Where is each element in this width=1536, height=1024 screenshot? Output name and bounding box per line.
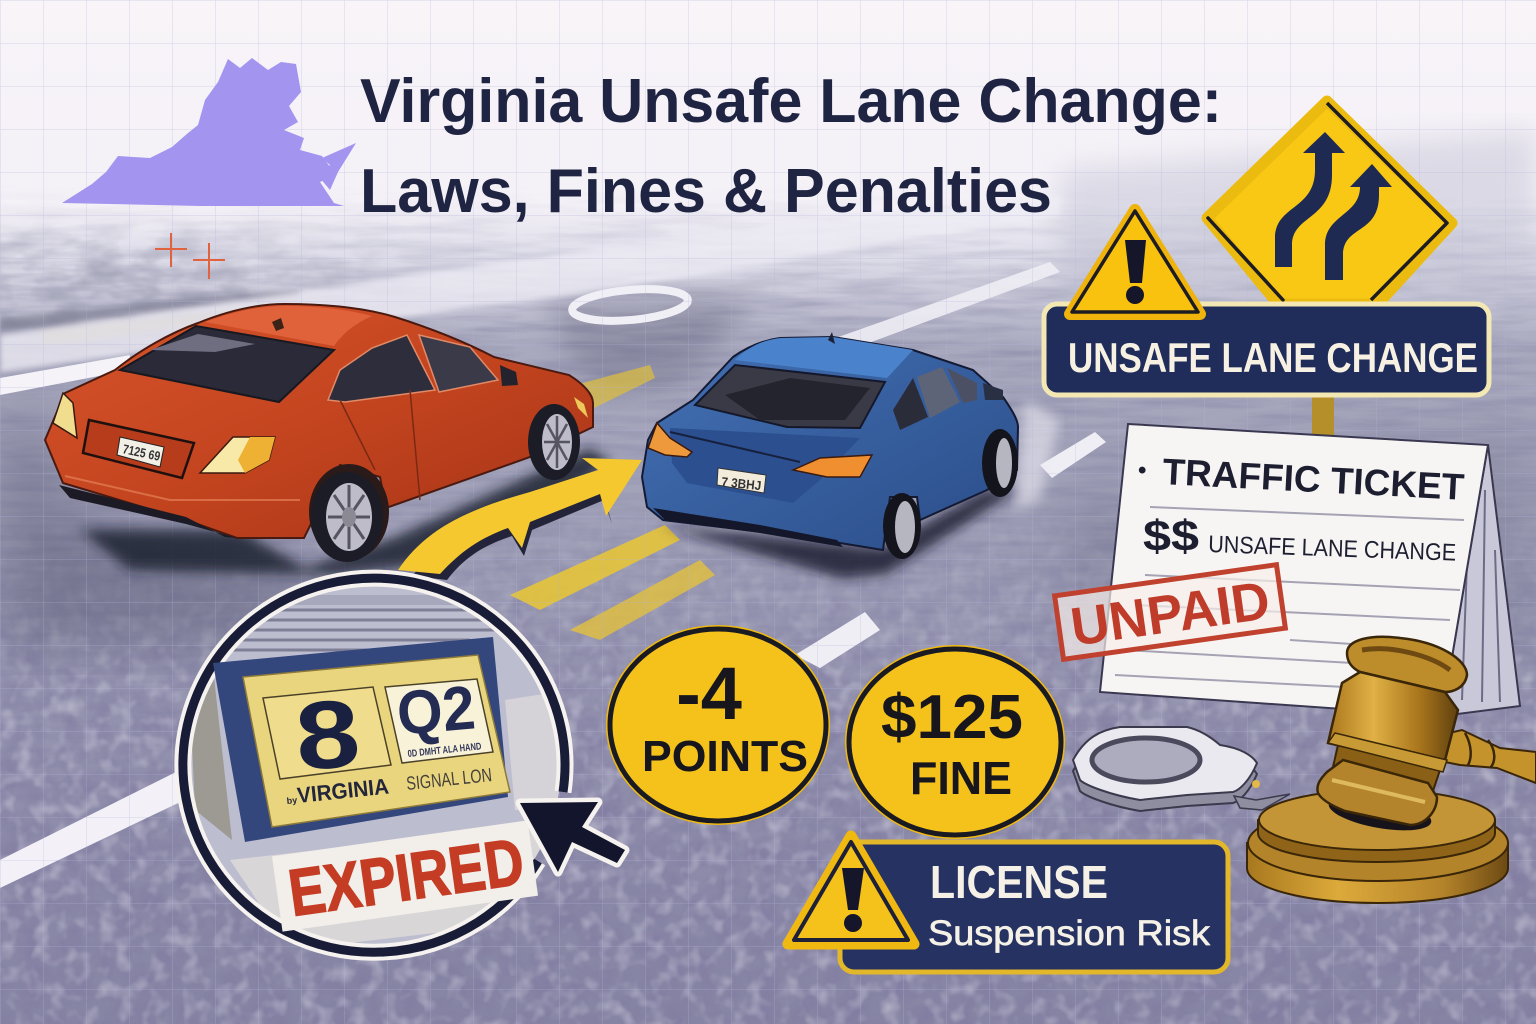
panel: traffic ticket: • <box>1138 457 1146 484</box>
icon: two arrows <box>1275 132 1392 280</box>
registration sign: Q2 <box>394 673 478 749</box>
icon: warning triangle top <box>1070 210 1200 314</box>
registration sign <box>213 637 510 842</box>
panel: traffic ticket: $$ <box>1143 512 1199 561</box>
panel: traffic ticket <box>1055 424 1520 716</box>
icon: gavel <box>1247 637 1536 903</box>
panel: license suspension risk: Suspension Risk <box>928 914 1211 953</box>
blue car front wheel <box>982 429 1018 497</box>
registration sign: by <box>286 795 298 806</box>
red car rear wheel <box>311 472 383 562</box>
badge: minus 4 points: POINTS <box>642 732 808 781</box>
title: Laws, Fines & Penalties <box>360 157 1052 226</box>
sign post <box>1312 396 1334 438</box>
badge: 125 dollar fine: FINE <box>910 752 1012 804</box>
red car <box>45 304 610 575</box>
icon: cursor arrow <box>520 802 625 872</box>
expired label: EXPIRED <box>284 824 528 930</box>
badge: minus 4 points: -4 <box>676 652 742 735</box>
blue car rear wheel <box>883 493 921 559</box>
badge: 125 dollar fine: $125 <box>881 683 1023 752</box>
red car front wheel <box>528 404 580 480</box>
blue car <box>642 332 1018 578</box>
blue car license plate: 7 3BHJ <box>721 474 762 493</box>
registration sign: VIRGINIA <box>296 773 390 808</box>
registration sign: 0D DMHT ALA HAND <box>407 741 482 760</box>
icon: handcuffs <box>1073 727 1290 811</box>
badge: 125 dollar fine <box>846 646 1064 838</box>
registration sign: SIGNAL LON <box>405 765 493 795</box>
icon: Virginia state silhouette <box>62 58 356 206</box>
icon: warning triangle <box>788 836 914 944</box>
banner: unsafe lane change <box>1044 304 1489 395</box>
magnifier circle with expired tag <box>183 578 570 952</box>
sign: lane-shift diamond <box>1207 101 1452 304</box>
title: Virginia Unsafe Lane Change: <box>360 67 1222 136</box>
red car license plate: 7125 69 <box>121 441 162 464</box>
badge: minus 4 points <box>607 626 829 824</box>
title <box>360 67 1222 226</box>
stamp: unpaid: UNPAID <box>1067 570 1273 658</box>
icon: orange sparkles <box>155 233 225 279</box>
registration sign: 8 <box>292 680 363 791</box>
panel: license suspension risk: LICENSE <box>930 856 1108 908</box>
panel: traffic ticket: TRAFFIC TICKET <box>1162 451 1466 508</box>
panel: license suspension risk <box>788 836 1228 972</box>
panel: traffic ticket: UNSAFE LANE CHANGE <box>1208 531 1457 567</box>
yellow lane-change arrow <box>398 458 642 580</box>
